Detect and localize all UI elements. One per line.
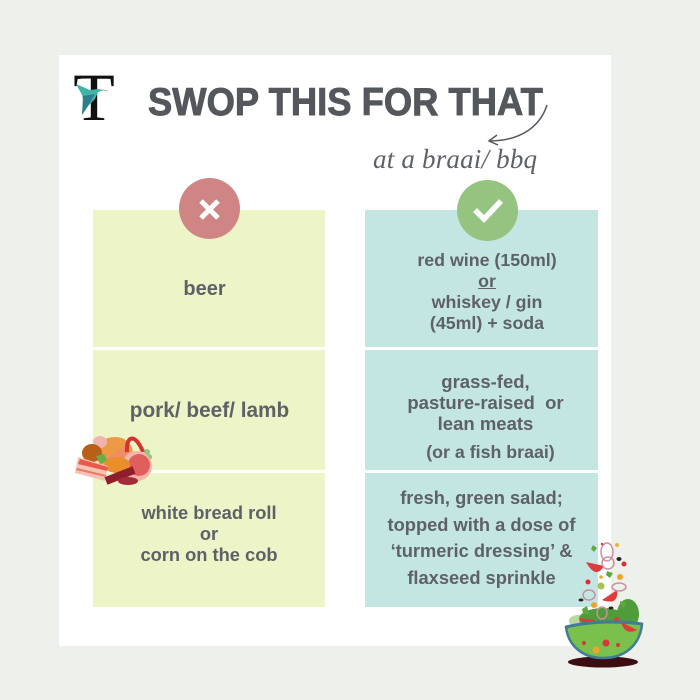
text: bread: corn on the cob bbox=[140, 544, 278, 565]
text: red wine: (45ml) + soda bbox=[430, 313, 544, 333]
icon: meat platter bbox=[75, 436, 152, 485]
text: grass-fed: lean meats bbox=[438, 413, 533, 434]
text: beer: beer bbox=[183, 278, 226, 300]
white card bbox=[59, 55, 611, 646]
panel: left column bbox=[93, 210, 325, 607]
logo bbox=[73, 68, 115, 124]
icon: hummingbird bbox=[76, 84, 108, 115]
title: SWOP THIS FOR THAT bbox=[148, 81, 543, 124]
text: grass-fed: pasture-raised or bbox=[407, 392, 564, 413]
text: salad: flaxseed sprinkle bbox=[407, 566, 556, 588]
icon: check bbox=[457, 180, 518, 241]
panel: right column bbox=[365, 210, 598, 607]
arrow bbox=[488, 104, 548, 146]
text: salad: ‘turmeric dressing’ & bbox=[391, 540, 572, 561]
text: pork: pork/ beef/ lamb bbox=[130, 399, 289, 422]
text: grass-fed: grass-fed, bbox=[441, 371, 530, 392]
text: red wine: whiskey / gin bbox=[432, 292, 542, 312]
text: salad: topped with a dose of bbox=[388, 514, 575, 534]
subtitle: at a braai/ bbq bbox=[373, 144, 537, 174]
icon: salad bowl bbox=[564, 542, 644, 668]
row divider lower bbox=[93, 470, 598, 473]
text: bread: white bread roll bbox=[141, 502, 277, 523]
text: red wine: or bbox=[478, 271, 496, 291]
icon: cross bbox=[179, 178, 240, 239]
text: grass-fed bbox=[407, 371, 564, 462]
row divider upper bbox=[93, 347, 598, 350]
column gap bbox=[325, 210, 365, 607]
text: grass-fed: (or a fish braai) bbox=[426, 442, 555, 462]
text: salad: fresh, green salad; bbox=[400, 487, 563, 508]
text: salad bbox=[388, 487, 576, 588]
text: bread: or bbox=[200, 523, 218, 544]
text: red wine: red wine (150ml) bbox=[417, 250, 557, 270]
text: red wine bbox=[417, 250, 557, 333]
text: bread bbox=[140, 502, 278, 565]
